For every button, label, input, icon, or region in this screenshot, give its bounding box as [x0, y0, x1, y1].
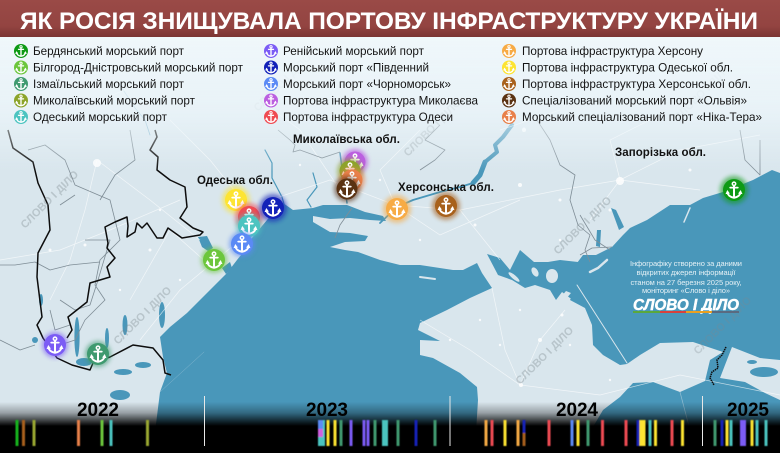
title: ЯК РОСІЯ ЗНИЩУВАЛА ПОРТОВУ ІНФРАСТРУКТУРУ УКРАЇНИ — [20, 8, 758, 35]
sea: western Black Sea — [155, 203, 492, 432]
legend: Odesa oblast infrastructure: Портова інфраструктура Одеської обл. — [522, 62, 733, 74]
timeline — [0, 396, 780, 453]
marker: Nika-Tera — [339, 167, 365, 193]
label: Zaporizhzhia oblast: Запорізька обл. — [615, 147, 706, 159]
marker: Izmail — [85, 341, 111, 367]
watermarks: СЛОВО І ДІЛО — [552, 194, 614, 257]
legend: Chornomorsk: Морський порт «Чорноморськ» — [283, 78, 451, 91]
legend: Nika-Tera: Морський спеціалізований порт «Ніка-Тера» — [522, 111, 762, 124]
legend: Berdiansk: Бердянський морський порт — [33, 45, 185, 58]
legend: Izmail: Ізмаїльський морський порт — [33, 78, 185, 91]
source note — [630, 259, 742, 295]
legend: Mykolaiv infrastructure: Портова інфраструктура Миколаєва — [283, 94, 478, 108]
source note: станом на 27 березня 2025 року, — [630, 278, 742, 287]
legend — [14, 44, 762, 124]
state borders — [8, 130, 726, 385]
watermarks: СЛОВО І ДІЛО — [692, 294, 754, 357]
legend: Bilhorod-Dnistrovskyi: Білгород-Дністровський морський порт — [33, 62, 244, 74]
roads and settlements — [0, 80, 780, 395]
rivers — [120, 85, 512, 223]
marker: Odesa port — [236, 213, 262, 239]
year labels: 2023 — [306, 400, 348, 421]
marker: Reni — [42, 332, 68, 358]
year labels: 2022 — [77, 400, 119, 421]
marker: Odesa infrastructure — [235, 203, 263, 231]
source note: відкритих джерел інформації — [636, 268, 736, 277]
year dividers — [204, 396, 703, 446]
sea: Azov and southern Black Sea — [570, 170, 780, 432]
watermarks: СЛОВО І ДІЛО — [19, 168, 81, 231]
watermarks: СЛОВО І ДІЛО — [402, 96, 464, 159]
Sivash lagoon — [487, 250, 584, 304]
watermarks: СЛОВО І ДІЛО — [112, 284, 174, 347]
map markers — [42, 149, 748, 367]
label: Odesa oblast: Одеська обл. — [197, 175, 273, 187]
watermarks: СЛОВО І ДІЛО — [672, 61, 734, 124]
land spits — [160, 208, 690, 430]
marker: Pivdennyi — [259, 194, 287, 222]
legend: Mykolaiv port: Миколаївський морський порт — [33, 94, 196, 108]
year labels — [77, 400, 769, 421]
marker: Olvia — [334, 176, 360, 202]
year labels: 2025 — [727, 400, 769, 421]
title band — [0, 0, 780, 37]
legend: Kherson infrastructure: Портова інфраструктура Херсону — [522, 45, 703, 58]
legend: Reni: Ренійський морський порт — [283, 45, 425, 58]
marker: Bilhorod-Dnistrovskyi — [201, 247, 227, 273]
thin administrative borders — [0, 120, 760, 350]
watermarks — [19, 51, 754, 387]
limans and lakes — [32, 208, 624, 400]
watermarks: СЛОВО І ДІЛО — [514, 324, 576, 387]
legend: Odesa port: Одеський морський порт — [33, 111, 168, 124]
attack bars — [16, 420, 768, 446]
year labels: 2024 — [556, 400, 598, 421]
legend: Odesa infrastructure: Портова інфраструктура Одеси — [283, 111, 453, 124]
marker: Mykolaiv infrastructure — [342, 149, 368, 175]
watermarks: СЛОВО І ДІЛО — [252, 51, 314, 114]
legend: Olvia: Спеціалізований морський порт «Ольвія» — [522, 94, 747, 108]
marker: Mykolaiv port — [337, 158, 363, 184]
Taman lagoons — [747, 360, 778, 377]
marker: Chornomorsk — [229, 231, 255, 257]
marker: Odesa oblast infrastructure — [222, 186, 250, 214]
label: Kherson oblast: Херсонська обл. — [398, 182, 494, 194]
label: Mykolaiv oblast: Миколаївська обл. — [293, 134, 400, 146]
legend background fade — [0, 37, 780, 172]
logo: Slovo i Dilo: СЛОВО І ДІЛО — [633, 297, 739, 314]
source note: Інфографіку створено за даними — [630, 259, 742, 268]
source note: моніторинг «Слово і діло» — [642, 286, 730, 295]
legend: Pivdennyi: Морський порт «Південний — [283, 62, 429, 74]
legend: Kherson oblast infrastructure: Портова інфраструктура Херсонської обл. — [522, 78, 751, 91]
marker: Kherson oblast infrastructure — [432, 192, 460, 220]
marker: Kherson infrastructure — [383, 195, 411, 223]
marker: Berdiansk — [720, 176, 748, 204]
